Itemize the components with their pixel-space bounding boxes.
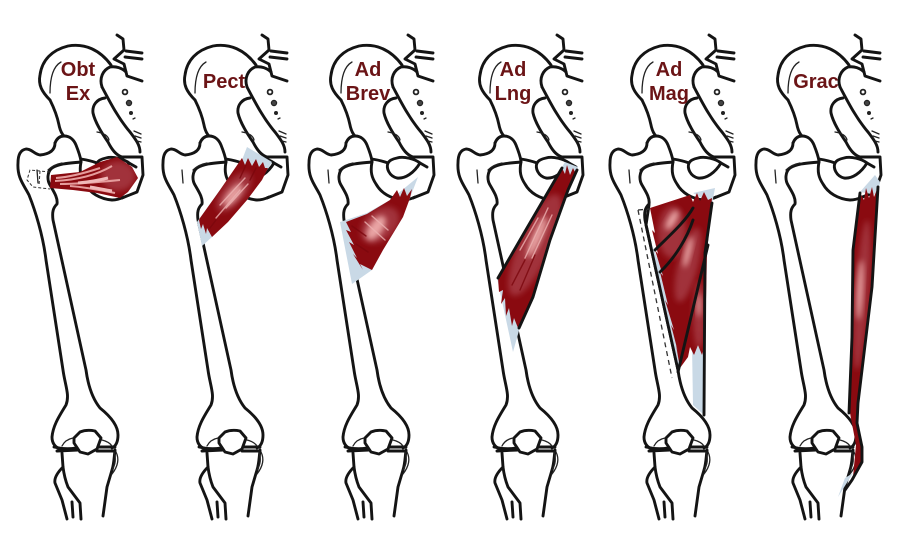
panel: gracilis — [756, 35, 881, 519]
muscle: adductor brevis — [340, 177, 418, 284]
label: Ad Brev: Brev — [346, 83, 391, 105]
panel: adductor magnus — [610, 35, 735, 519]
label: Ad Mag — [649, 59, 689, 105]
muscle: adductor longus — [497, 162, 578, 352]
muscle: gracilis — [838, 175, 880, 497]
femoral insertion dashed outline — [27, 170, 50, 189]
panel: pectineus — [163, 35, 288, 519]
label: Ad Mag: Mag — [649, 83, 689, 105]
femoral insertion dashed line — [638, 209, 672, 378]
label: Ad Lng: Ad — [500, 59, 526, 81]
muscle: obturator externus — [50, 157, 138, 198]
panel: adductor longus — [458, 35, 583, 519]
muscle: adductor magnus — [646, 188, 715, 415]
muscle: pectineus — [197, 147, 272, 246]
label: Obt Ex — [61, 59, 96, 105]
panel: obturator externus — [18, 35, 143, 519]
label: Pect: Pect — [203, 71, 245, 93]
label: Ad Mag: Ad — [656, 59, 682, 81]
label: Ad Lng — [495, 59, 531, 105]
label: Ad Brev — [346, 59, 391, 105]
panel: adductor brevis — [309, 35, 434, 519]
label: Obt Ex: Obt — [61, 59, 96, 81]
label: Grac: Grac — [793, 71, 839, 93]
label: Ad Lng: Lng — [495, 83, 531, 105]
tendon and femur lines — [646, 203, 712, 415]
label: Obt Ex: Ex — [66, 83, 90, 105]
label: Ad Brev: Ad — [355, 59, 381, 81]
